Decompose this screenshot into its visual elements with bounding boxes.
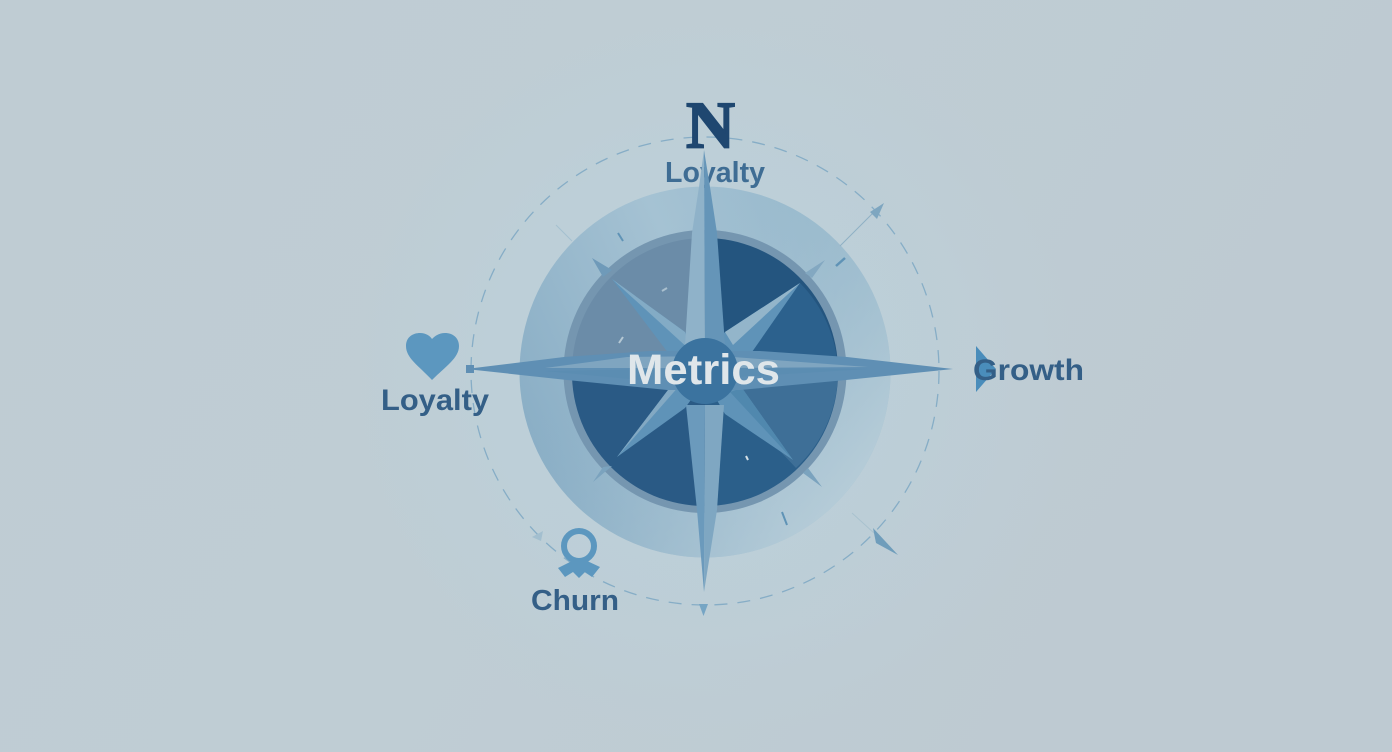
- dial quadrant: south-west: [572, 371, 705, 506]
- compass star: east-west points: [466, 351, 953, 390]
- label: north Loyalty: Loyalty: [665, 157, 765, 189]
- icon: growth triangle: [976, 346, 996, 392]
- center hub: [672, 338, 738, 404]
- compass ring and dial: [564, 230, 846, 513]
- dial flecks: [619, 288, 748, 460]
- outer disc: [520, 186, 890, 558]
- icon: ribbon: [558, 531, 600, 578]
- compass star: diagonal points: [592, 258, 825, 487]
- dial quadrant: north-east: [705, 238, 838, 371]
- dashed orbit ring: [471, 137, 939, 605]
- label: Metrics: Metrics: [627, 346, 780, 394]
- label: Growth: Growth: [973, 354, 1084, 387]
- icon: heart: [406, 333, 459, 380]
- label: west Loyalty: Loyalty: [381, 384, 489, 417]
- compass star: north-south points: [685, 150, 725, 592]
- north letter: N: [686, 88, 735, 162]
- dial quadrant: north-west: [572, 238, 705, 371]
- dial quadrant: south-east: [705, 371, 838, 506]
- label: Churn: Churn: [531, 585, 619, 617]
- orbit tick marks: [532, 203, 898, 616]
